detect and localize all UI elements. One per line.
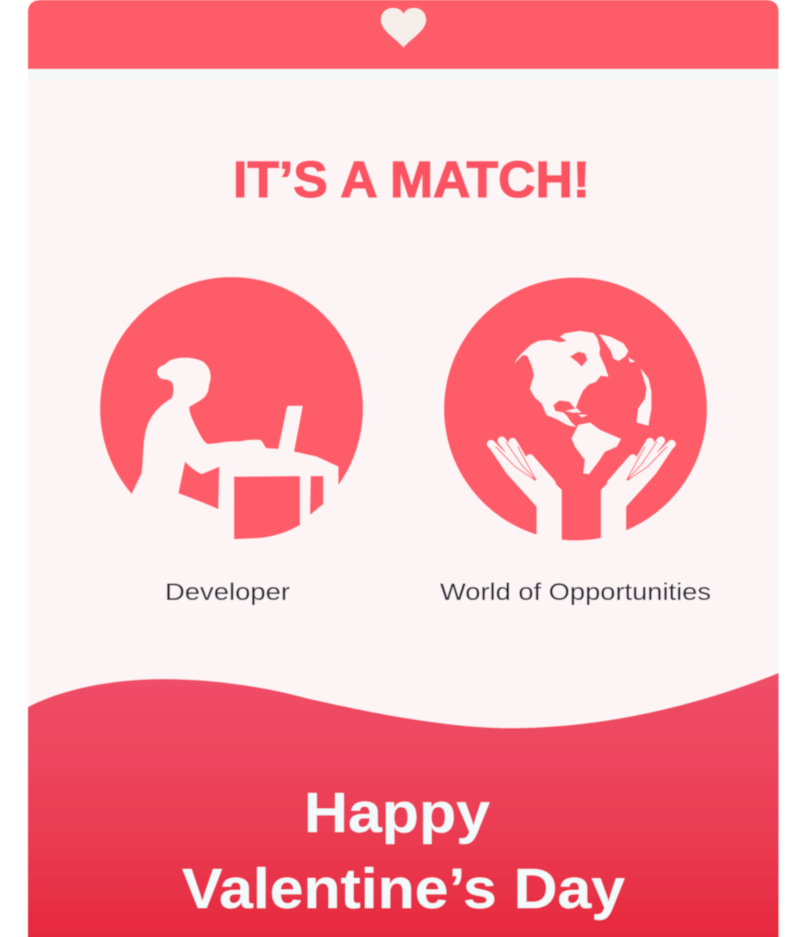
header bar [28, 0, 778, 69]
happy line: Happy [304, 781, 490, 845]
label: world of opportunities: World of Opportunities [440, 579, 711, 606]
closing message [182, 781, 625, 921]
circle: globe background [444, 278, 707, 540]
title: IT’S A MATCH! [233, 151, 590, 208]
icon: heart [381, 8, 426, 48]
circle: developer background [100, 277, 363, 540]
icon: globe [514, 331, 651, 474]
icon: developer at desk silhouette [132, 358, 353, 550]
icon: cupped hands [488, 441, 674, 550]
label: developer: Developer [165, 579, 290, 606]
panel: world of opportunities [444, 278, 707, 550]
wave banner [28, 673, 778, 937]
panel: developer [100, 277, 363, 550]
valentine's day line: Valentine’s Day [182, 857, 625, 921]
